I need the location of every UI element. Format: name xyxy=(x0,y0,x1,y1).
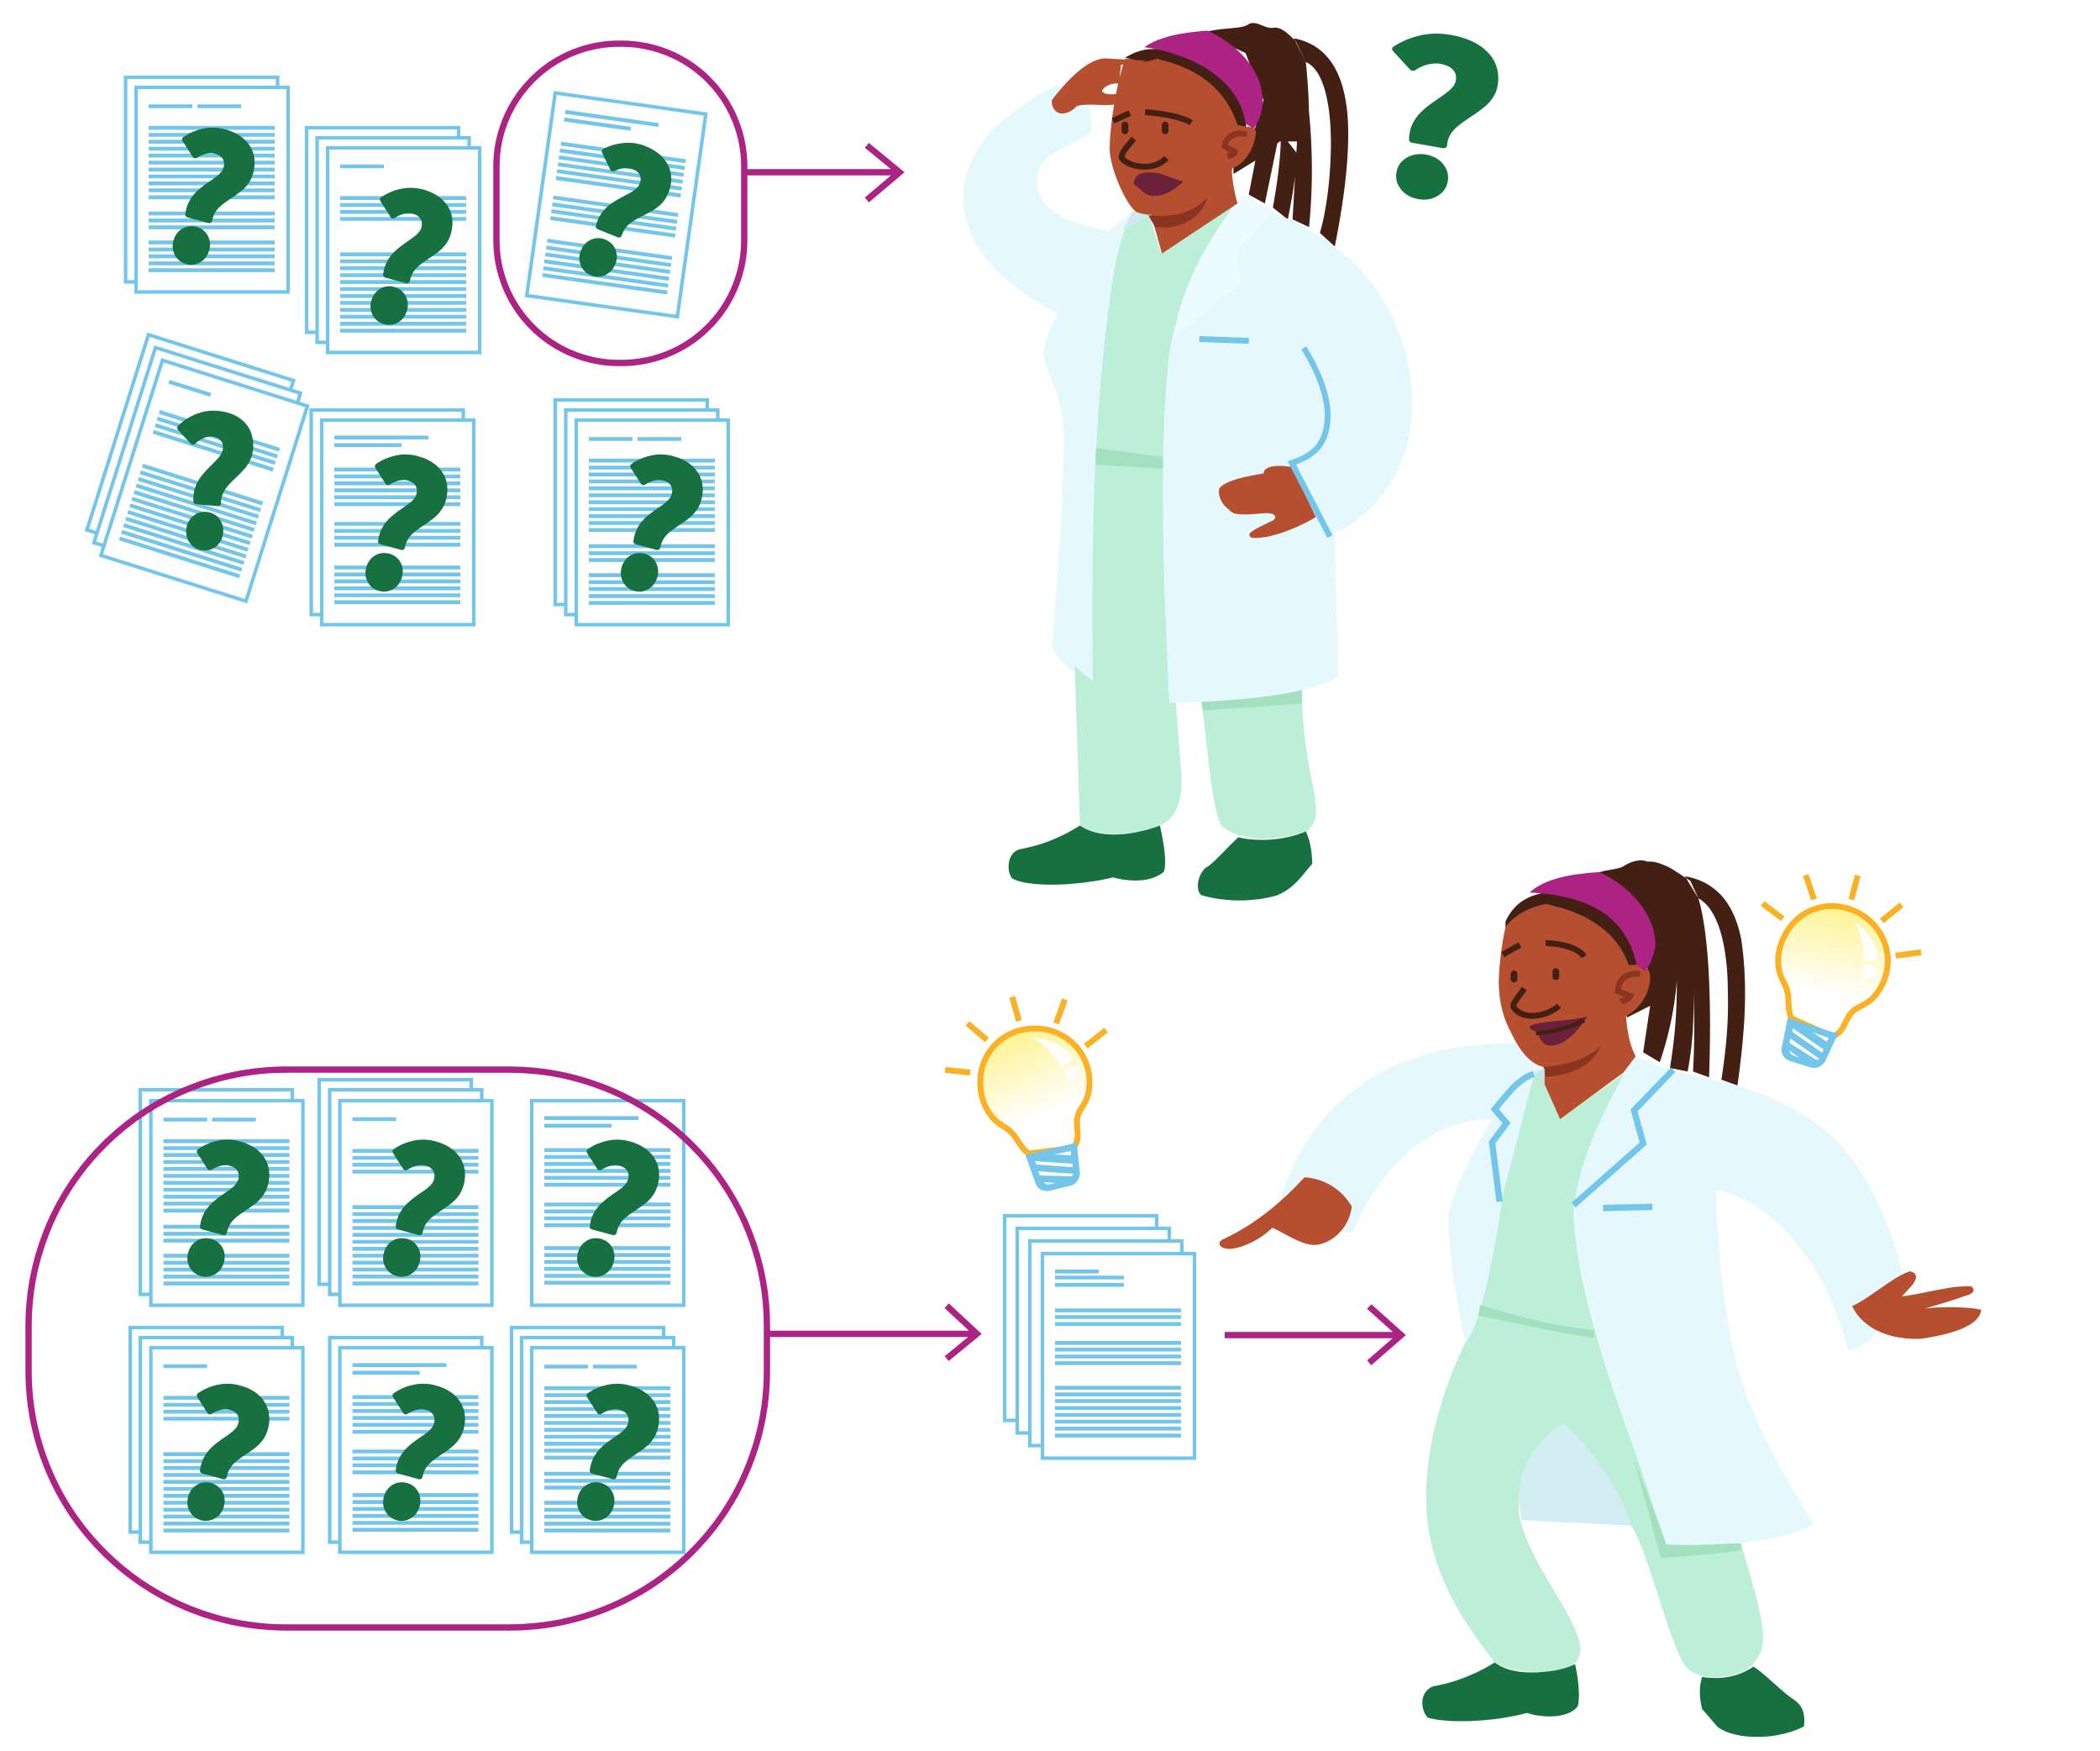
coat lapels and pocket xyxy=(1492,1070,1673,1208)
collar shadow xyxy=(1123,211,1147,230)
facial features xyxy=(1113,112,1247,196)
hand shading eyes xyxy=(1052,58,1147,113)
selected document with question mark: ? xyxy=(536,72,710,334)
facial features xyxy=(1503,943,1640,1045)
document 3: ? xyxy=(539,1070,688,1331)
tilted document stack D with question mark: ? xyxy=(158,345,267,598)
document 6: ? xyxy=(539,1314,688,1575)
document 4: ? xyxy=(150,1314,298,1575)
icon: lightbulb above happy researcher xyxy=(1700,841,1938,1091)
hair ponytail xyxy=(1599,860,1745,1086)
open hand xyxy=(1852,1271,1982,1339)
face, neck and ear xyxy=(1499,904,1650,1119)
tilted document stack D with question mark xyxy=(81,334,313,601)
lab coat front and near sleeve xyxy=(1573,1056,1902,1545)
headband xyxy=(1144,30,1263,129)
document 5: ? xyxy=(345,1314,494,1575)
arrow: documents to synthesis xyxy=(767,1306,977,1359)
trouser shadow xyxy=(1634,1459,1741,1558)
coat back between legs xyxy=(1518,1423,1634,1526)
document stack B with question mark: ? xyxy=(333,118,481,379)
scrubs waistband xyxy=(1478,1305,1593,1338)
trouser shadow xyxy=(1201,690,1302,711)
hair line under headband xyxy=(1125,49,1247,127)
scrubs waistband xyxy=(1095,448,1163,469)
hand on hip xyxy=(1219,466,1316,538)
synthesised document stack xyxy=(1005,1216,1194,1459)
outline around all documents xyxy=(29,1070,767,1627)
arrow: synthesis to happy researcher xyxy=(1225,1307,1401,1363)
icon: lightbulb over synthesis document xyxy=(945,996,1106,1191)
lab coat back and raised sleeve xyxy=(963,86,1141,681)
pointing hand xyxy=(1220,1177,1352,1249)
arrow: selected document to confused researcher xyxy=(746,145,900,200)
shoes xyxy=(1009,826,1312,901)
panel: all documents grouped, bottom left xyxy=(29,1070,767,1627)
document stack E with question mark: ? xyxy=(328,385,476,645)
collar shadow xyxy=(1534,1069,1545,1083)
neck shadow xyxy=(1544,1047,1600,1076)
neck shadow xyxy=(1148,197,1207,228)
lab coat front xyxy=(1163,195,1412,703)
figure: happy researcher presenting xyxy=(1220,860,1982,1737)
face and ear xyxy=(1110,59,1256,215)
lab coat lapel xyxy=(1173,195,1273,339)
scrubs top and front leg xyxy=(1074,203,1236,834)
coat pocket and sleeve seams xyxy=(1200,339,1330,537)
figure: confused researcher shading eyes xyxy=(963,23,1412,901)
document stack A with question mark: ? xyxy=(135,58,283,318)
lab coat far sleeve xyxy=(1280,1044,1543,1343)
selection outline around one document xyxy=(496,44,744,363)
back trouser leg xyxy=(1201,690,1316,839)
neck xyxy=(1147,159,1237,254)
shoes xyxy=(1422,1663,1804,1737)
document 1: ? xyxy=(150,1070,298,1331)
headband xyxy=(1530,872,1656,971)
hair ponytail xyxy=(1201,23,1348,246)
document stack F with question mark: ? xyxy=(583,385,732,645)
scrubs xyxy=(1426,1070,1763,1677)
hair line under headband xyxy=(1505,892,1640,965)
panel: scattered documents top left xyxy=(81,44,744,645)
document 2: ? xyxy=(345,1070,494,1331)
